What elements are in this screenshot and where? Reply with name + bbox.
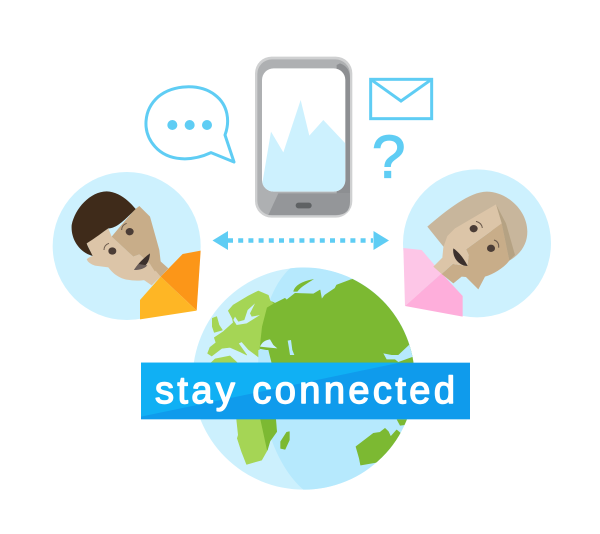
continents — [208, 277, 430, 465]
shirt — [140, 251, 201, 319]
question mark icon: ? — [372, 124, 405, 191]
Australia — [356, 428, 401, 465]
Arctic island — [293, 279, 314, 292]
Indonesia — [397, 419, 408, 426]
Mediterranean east — [258, 350, 272, 363]
shirt — [403, 248, 463, 317]
phone — [255, 57, 352, 218]
eyes — [108, 228, 134, 255]
Europe — [208, 291, 273, 357]
phone screen — [262, 68, 345, 192]
globe shaded hemisphere — [258, 267, 415, 490]
mouth — [453, 248, 468, 266]
eyes — [470, 225, 495, 252]
envelope icon — [371, 79, 432, 119]
Africa south, light — [237, 419, 267, 464]
avatar circle background — [403, 169, 551, 317]
Baltic sea — [233, 303, 260, 325]
speech bubble icon — [146, 87, 234, 162]
banner highlight — [141, 363, 400, 417]
neck — [137, 259, 168, 285]
Sea of Japan — [383, 344, 412, 362]
illustration: phone and message icons — [146, 57, 432, 218]
Africa south, dark — [261, 419, 277, 450]
Black sea — [260, 339, 277, 348]
United Kingdom — [212, 317, 222, 332]
Africa north — [210, 356, 238, 363]
hair — [72, 191, 136, 256]
illustration: woman avatar — [403, 169, 551, 317]
avatar circle background — [53, 172, 201, 320]
neck — [433, 258, 470, 283]
double arrow — [212, 231, 389, 250]
Madagascar — [281, 432, 289, 449]
hair — [427, 192, 527, 261]
phone body — [255, 57, 352, 218]
banner — [141, 363, 470, 419]
Asia — [260, 279, 414, 363]
eyebrows — [104, 223, 127, 250]
home button — [296, 203, 312, 208]
screen chart — [262, 100, 345, 192]
mouth — [134, 253, 150, 270]
globe ocean — [193, 268, 415, 490]
illustration: globe — [193, 267, 430, 490]
face — [87, 206, 161, 281]
banner base — [141, 363, 470, 419]
banner text: stay connected — [155, 370, 455, 412]
eyebrows — [476, 221, 499, 248]
face — [442, 204, 509, 289]
Caspian sea — [288, 340, 294, 355]
illustration: man avatar — [53, 172, 201, 320]
